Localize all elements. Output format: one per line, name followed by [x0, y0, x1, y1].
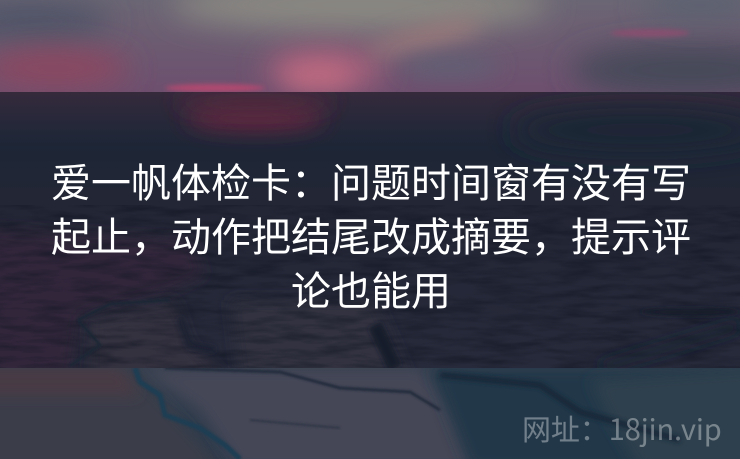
- title: 起止，动作把结尾改成摘要，提示评: [51, 205, 691, 263]
- sea: [0, 92, 740, 380]
- sky: [0, 0, 740, 96]
- title: 论也能用: [291, 259, 451, 317]
- watermark: 网址：18jin.vip: [522, 407, 722, 449]
- title: 爱一帆体检卡：问题时间窗有没有写: [51, 151, 691, 209]
- shore: [0, 368, 740, 459]
- title: [51, 151, 691, 317]
